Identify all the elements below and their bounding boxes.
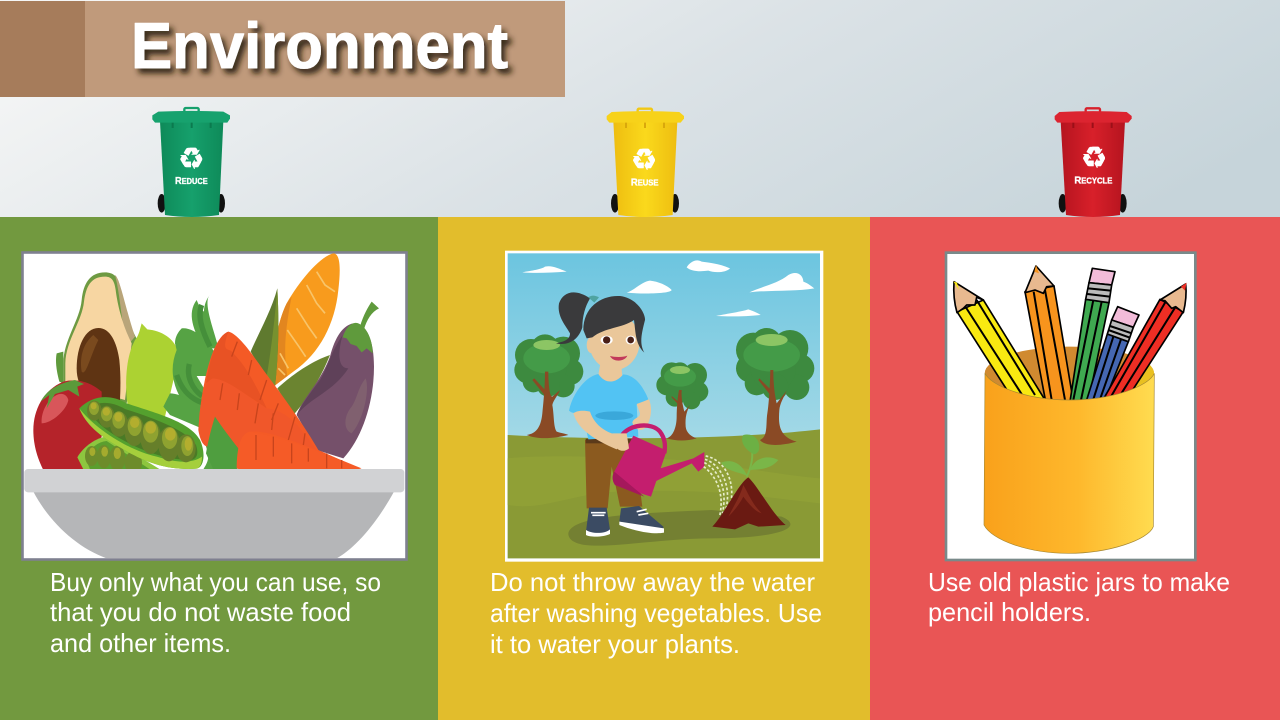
shirt	[569, 374, 648, 439]
orange pencil	[1025, 266, 1073, 402]
caption: reduce: that you do not waste food	[50, 597, 351, 627]
blue pencil	[1087, 307, 1139, 400]
cup back	[985, 347, 1154, 400]
neck	[598, 360, 622, 383]
bin: reduce: REDUCE	[175, 176, 208, 187]
cup front	[984, 373, 1154, 553]
illustration: girl watering plant	[506, 252, 822, 560]
bin: reuse	[607, 109, 684, 217]
yellow pencil	[954, 282, 1045, 400]
bin: recycle: ♻	[1081, 141, 1107, 175]
caption: reuse	[490, 567, 822, 659]
caption: reduce: Buy only what you can use, so	[50, 567, 381, 597]
background	[0, 0, 1280, 217]
white gap	[197, 376, 206, 388]
tomato	[33, 380, 102, 470]
girl	[556, 292, 786, 537]
greens	[163, 295, 238, 469]
tree right	[736, 328, 814, 445]
pants	[585, 438, 642, 508]
red pencil	[1103, 284, 1186, 399]
title: Environment	[131, 9, 508, 82]
avocado	[56, 352, 63, 383]
panel: recycle	[870, 217, 1280, 720]
bin: reuse: REUSE	[631, 178, 659, 189]
back pea pod	[77, 437, 160, 469]
illustration: pencil holder	[946, 253, 1195, 560]
caption: reuse: Do not throw away the water	[490, 567, 815, 597]
eyes and mouth	[601, 336, 636, 361]
shoes	[586, 508, 610, 535]
hair	[583, 296, 645, 353]
water drops	[704, 456, 732, 516]
leaf back	[277, 355, 330, 415]
panel: reuse	[438, 217, 870, 720]
face	[589, 313, 640, 370]
tree middle	[656, 362, 708, 440]
bin: recycle	[1055, 108, 1132, 217]
lime	[126, 323, 177, 417]
plant	[747, 447, 752, 477]
eggplant	[360, 302, 379, 329]
ground	[508, 429, 820, 558]
arms	[573, 411, 627, 449]
ponytail	[556, 292, 590, 344]
corn	[273, 253, 340, 387]
bin: reuse: ♻	[631, 143, 657, 177]
caption: recycle	[928, 567, 1230, 627]
carrots	[199, 332, 363, 470]
bin: recycle: RECYCLE	[1074, 175, 1113, 186]
front pea pod	[79, 397, 204, 469]
caption: reuse: it to water your plants.	[490, 629, 740, 659]
caption: reuse: after washing vegetables. Use	[490, 598, 822, 628]
caption: reduce: and other items.	[50, 628, 231, 658]
caption: recycle: pencil holders.	[928, 597, 1091, 627]
caption: reduce	[50, 567, 381, 658]
title banner	[0, 1, 565, 97]
panel: reduce	[0, 217, 438, 720]
caption: recycle: Use old plastic jars to make	[928, 567, 1230, 597]
bin: reduce	[152, 108, 230, 217]
illustration: bowl of vegetables	[22, 252, 406, 560]
green pencil	[1070, 268, 1115, 402]
soil	[712, 477, 786, 529]
bin: reduce: ♻	[178, 141, 204, 175]
tree left	[514, 334, 583, 438]
bowl	[33, 492, 394, 558]
watering can	[621, 425, 665, 453]
clouds	[522, 260, 814, 316]
